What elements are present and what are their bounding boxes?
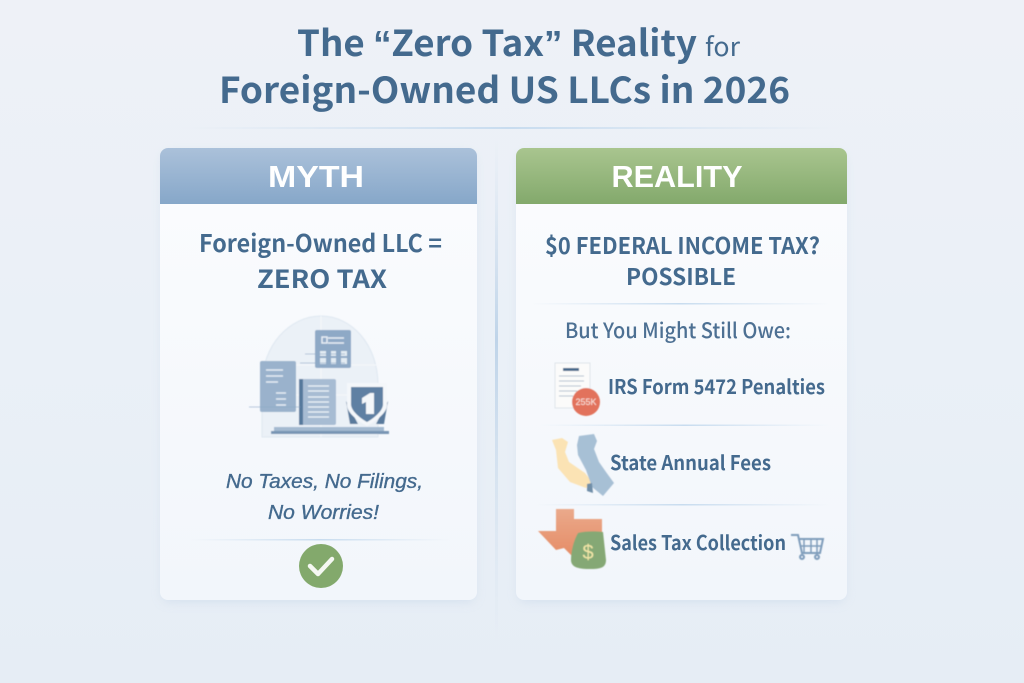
reality claim: $0 FEDERAL INCOME TAX? [545, 227, 820, 261]
item: state fees [552, 434, 771, 496]
myth claim: ZERO TAX [257, 260, 387, 296]
myth tagline [226, 471, 423, 524]
icon: check mark [299, 544, 343, 588]
subheading: But You Might Still Owe: [565, 315, 791, 345]
myth tagline: No Worries! [268, 502, 379, 524]
title: for [705, 27, 741, 64]
icon: form with penalty badge: 255K [575, 397, 597, 407]
title [219, 15, 790, 114]
myth tagline: No Taxes, No Filings, [226, 471, 423, 493]
myth header [160, 148, 477, 204]
title: The “Zero Tax” Reality [297, 15, 697, 67]
panel: reality [516, 148, 847, 602]
icon: state maps [552, 434, 614, 496]
reality header [516, 148, 847, 204]
icon: form with penalty badge [555, 363, 600, 416]
reality claim [545, 227, 820, 292]
icon: texas and money bag [538, 509, 606, 569]
item: form 5472: IRS Form 5472 Penalties [608, 371, 825, 400]
myth claim: Foreign-Owned LLC = [199, 224, 442, 259]
icon: documents and shield [249, 316, 389, 437]
item: sales tax: Sales Tax Collection [610, 527, 786, 556]
item: sales tax [538, 509, 823, 569]
icon: shopping cart [791, 535, 823, 559]
reality claim: POSSIBLE [626, 258, 736, 292]
icon: texas and money bag: $ [582, 542, 594, 564]
myth header: MYTH [268, 159, 364, 194]
item: form 5472 [555, 363, 825, 416]
title: Foreign-Owned US LLCs in 2026 [219, 62, 790, 114]
reality header: REALITY [612, 159, 743, 194]
panel: myth [160, 148, 477, 602]
myth claim [199, 224, 442, 296]
item: state fees: State Annual Fees [610, 447, 771, 476]
